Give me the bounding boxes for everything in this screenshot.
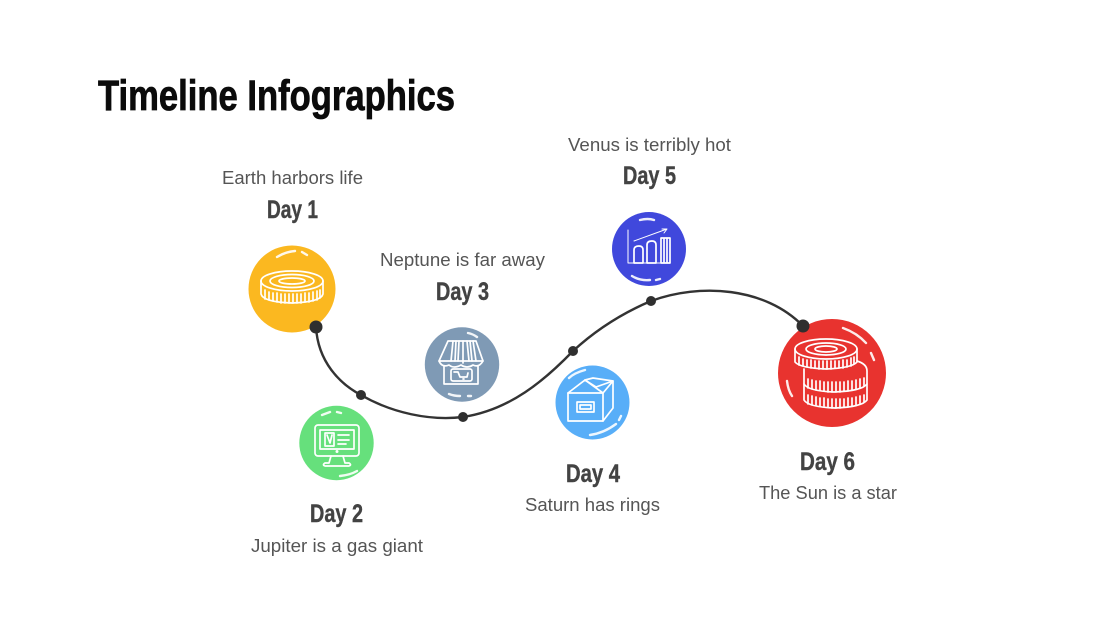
day 3 text: Neptune is far away <box>380 250 545 270</box>
day 5 text: Venus is terribly hot <box>568 135 731 155</box>
day 5 text <box>568 135 731 190</box>
day 3 text: Day 3 <box>436 278 489 306</box>
day 4 text <box>525 460 660 515</box>
day 2 text: Jupiter is a gas giant <box>251 536 423 556</box>
day 6 text <box>759 448 897 503</box>
icon: day 6 coins <box>778 319 886 427</box>
icon: day 4 box <box>556 366 630 440</box>
icon: day 1 coin <box>248 246 336 332</box>
timeline curve <box>310 291 810 422</box>
icon: day 2 monitor <box>299 406 374 480</box>
icon: day 5 chart <box>612 212 686 286</box>
day 1 text <box>222 168 363 224</box>
day 6 text: The Sun is a star <box>759 483 897 503</box>
day 2 text <box>251 500 423 556</box>
day 1 text: Earth harbors life <box>222 168 363 188</box>
icon: day 3 shop <box>425 327 499 402</box>
day 2 text: Day 2 <box>310 500 363 528</box>
title: Timeline Infographics <box>98 72 455 120</box>
day 4 text: Day 4 <box>566 460 620 488</box>
day 5 text: Day 5 <box>623 162 676 190</box>
day 1 text: Day 1 <box>267 196 318 224</box>
day 6 text: Day 6 <box>800 448 855 476</box>
day 3 text <box>380 250 545 306</box>
day 4 text: Saturn has rings <box>525 495 660 515</box>
